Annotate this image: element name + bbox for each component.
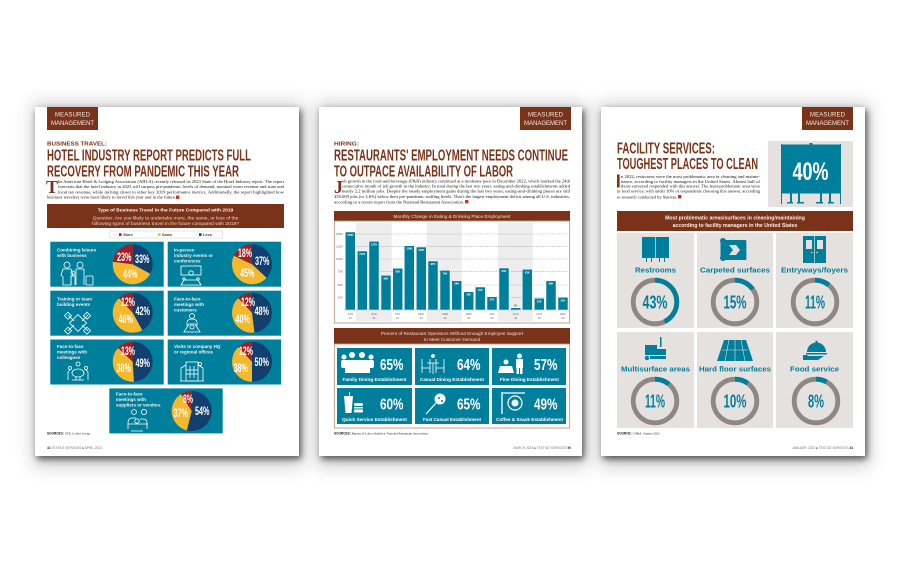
icon: team hands	[64, 312, 91, 334]
pie chart	[118, 297, 150, 326]
title	[334, 148, 568, 181]
bar chart: 25K	[561, 298, 566, 302]
problem areas header banner: according to facility managers in the United States	[673, 223, 798, 229]
bar chart: 22	[443, 316, 447, 320]
bar chart: DEC	[560, 312, 566, 316]
icon: restroom stall	[642, 237, 669, 262]
pie chart: 13%	[121, 346, 135, 358]
icon: carpet roll	[720, 238, 746, 261]
cell: multisurface: Multisurface areas	[621, 366, 690, 374]
panel: in-person events: industry events or	[174, 253, 213, 258]
panel: customers: customers	[174, 308, 197, 312]
bar chart: 21	[396, 316, 400, 320]
intro text: n 2022, restrooms were the most problematic area in cleaning and mainte-	[621, 174, 761, 180]
bar chart: 58K	[454, 282, 459, 286]
bar chart: 79K	[443, 271, 448, 275]
title	[617, 140, 758, 173]
bar chart: 23K	[537, 299, 542, 303]
tile: fine dining	[492, 348, 566, 385]
bar chart: 36K	[466, 293, 471, 297]
pie chart	[236, 297, 269, 326]
cell: carpeted surfaces	[697, 233, 773, 328]
intro text: nance, according to facility managers in the United States. Almost half of	[621, 179, 761, 185]
pie chart: 42%	[136, 306, 150, 318]
cell: carpeted surfaces: Carpeted surfaces	[700, 268, 770, 274]
title	[47, 148, 251, 181]
bar chart: 155K	[347, 233, 354, 237]
panel: combining leisure: Combining leisure	[57, 248, 97, 252]
callout: 40 percent banner	[768, 141, 853, 207]
source: SOURCE: CNBA, Statista 2022	[617, 432, 660, 436]
panel: suppliers: suppliers or vendors	[116, 402, 161, 408]
icon: double doors	[803, 236, 826, 263]
icon: fast food	[344, 392, 363, 413]
bar chart: FEB	[442, 312, 448, 316]
survey header banner	[47, 204, 284, 228]
icon: spatula	[426, 394, 446, 414]
panel: company HQ visits: or regional offices	[174, 350, 214, 354]
bar chart: 22	[490, 316, 494, 320]
cell: restrooms: Restrooms	[635, 268, 676, 274]
cell: restrooms	[617, 233, 694, 328]
cell: food service: Food service	[790, 366, 839, 374]
tile: coffee and snack: Coffee & Snack Establishment	[496, 417, 564, 422]
panel: combining leisure: with business	[56, 253, 87, 258]
panel: in-person events: conferences	[174, 258, 201, 264]
bar chart: 22	[561, 316, 565, 320]
pie chart: 40%	[236, 314, 250, 326]
icon: waiter	[498, 354, 523, 374]
intro text: J	[334, 177, 343, 197]
sources: SOURCES: Bureau of Labor Statistics, National Restaurant Association	[334, 432, 428, 436]
pie chart: 23%	[117, 252, 132, 264]
bar chart: 117K	[359, 252, 365, 256]
donut: 43 percent: 43%	[642, 292, 668, 312]
legend: Same	[162, 232, 173, 237]
bar chart: 58K	[549, 282, 554, 286]
bar chart: 22	[514, 316, 518, 320]
donut: 8 percent: 8%	[808, 392, 824, 412]
bar chart: AUG	[371, 312, 377, 316]
bar chart: 128K	[406, 247, 413, 251]
pie chart: 12%	[241, 297, 255, 309]
pie chart: 12%	[239, 346, 253, 358]
donut: 10 percent: 10%	[724, 392, 746, 412]
panel: company HQ visits: Visits to company HQ	[174, 344, 221, 349]
pie chart: 50%	[254, 357, 269, 369]
icon: office building	[180, 362, 204, 381]
survey header banner: following types of business travel in the future compared with 2019?	[92, 221, 239, 227]
cell: hard floor: Hard floor surfaces	[699, 366, 771, 374]
tile: quick service: 60%	[380, 396, 404, 414]
pie chart: 37%	[255, 256, 270, 268]
cell: multisurface	[617, 332, 694, 428]
pie chart	[174, 394, 210, 421]
tile: family dining: 65%	[380, 357, 404, 374]
section tag	[47, 107, 98, 130]
section tag: MANAGEMENT	[806, 121, 849, 127]
panel: colleagues	[50, 340, 164, 384]
survey header banner: Question: Are you likely to undertake more, the same, or less of the	[93, 216, 239, 222]
legend	[110, 231, 222, 238]
tile: fast casual: 65%	[457, 396, 480, 414]
tile: fine dining: Fine Dining Establishment	[500, 377, 560, 382]
icon: meeting table	[68, 362, 88, 380]
operators header banner	[334, 328, 570, 344]
tile: casual dining: Casual Dining Establishment	[420, 377, 485, 382]
page 3: facility services	[599, 104, 869, 466]
bar chart: 22	[538, 316, 541, 320]
cell: entryways: Entryways/foyers	[781, 268, 848, 274]
icon: serving cloche	[803, 341, 827, 360]
intro text: according to a recent report from the National Restaurant Association.	[334, 199, 464, 204]
cell: food service	[776, 332, 853, 428]
tile: fast casual	[415, 388, 489, 424]
bar chart: 137K	[371, 242, 377, 246]
donut: 15 percent: 15%	[724, 292, 746, 312]
pie chart	[116, 346, 150, 375]
icon: hardwood floor	[717, 340, 753, 361]
icon: cafe table	[422, 354, 444, 374]
pie chart: 38%	[116, 363, 131, 375]
chart title bar	[334, 211, 570, 221]
legend: More	[124, 232, 134, 237]
legend: Less	[203, 232, 212, 237]
icon: family table	[341, 352, 374, 373]
intro text: those surveyed responded with this answer. The least-problematic area were	[621, 184, 760, 189]
sources: SOURCES: STR, CoStar Group	[47, 432, 90, 436]
section tag: MANAGEMENT	[51, 121, 94, 127]
pie chart: 37%	[174, 408, 188, 420]
bar chart: DEC	[418, 312, 424, 316]
panel: training: Training or team	[57, 296, 92, 302]
panel: customers: meetings with	[174, 302, 204, 307]
kicker: HIRING:	[334, 142, 359, 148]
tile: family dining	[337, 348, 412, 385]
pie chart: 38%	[234, 363, 248, 375]
panel: training: building events	[57, 302, 91, 307]
bar chart: 75K	[338, 270, 343, 274]
panel: colleagues: meetings with	[57, 350, 87, 354]
cell: hard floor	[697, 332, 773, 428]
bar chart: JUN	[348, 312, 353, 316]
title: HOTEL INDUSTRY REPORT PREDICTS FULL	[47, 148, 251, 165]
intro text: ob growth in the food-and-beverage (F&B) industry continued at a moderate pace in December 2022, which marked the 24th	[342, 178, 571, 184]
bar chart: 125K	[336, 245, 343, 249]
bar chart: 125K	[418, 248, 425, 252]
problem areas header banner: Most problematic areas/surfaces in cleaning/maintaining	[665, 216, 805, 222]
intro text: consecutive month of job growth in the industry. In total during the last two years, eating-and-drinking establishments added	[342, 184, 571, 190]
bar chart: JUN	[489, 312, 495, 316]
icon: family	[61, 262, 93, 285]
intro text: local tax revenue, while inching closer to other key 2019 performance metrics. Additionally, the report highlighted how	[58, 189, 285, 195]
survey header banner: Type of Business Travel in the Future Compared with 2019	[98, 208, 234, 214]
footer: MARCH 2023 ■ TEXTILE SERVICES 59	[513, 446, 571, 450]
pie chart: 12%	[121, 297, 135, 309]
kicker: BUSINESS TRAVEL:	[47, 142, 107, 148]
bar chart: 25K	[338, 295, 343, 299]
title: FACILITY SERVICES:	[617, 140, 715, 158]
section tag: MANAGEMENT	[524, 121, 567, 127]
pie chart: 46%	[118, 314, 133, 326]
section tag: MEASURED	[528, 112, 564, 118]
bar chart: 50K	[338, 283, 343, 287]
tile: fine dining: 57%	[534, 357, 558, 374]
icon: conference	[181, 266, 201, 285]
donut: 11 percent: 11%	[805, 292, 825, 312]
problem areas header banner	[617, 211, 853, 231]
bar chart: 5K	[514, 304, 517, 308]
intro text: forecasts that the hotel industry in 2023 will surpass pre-pandemic levels of demand, nominal room revenue and state and	[58, 184, 285, 190]
tile: fast casual: Fast Casual Establishment	[423, 417, 482, 422]
icon: customer meeting	[184, 314, 200, 332]
section tag: MEASURED	[55, 112, 91, 118]
tile: family dining: Family Dining Establishment	[342, 377, 407, 382]
bar chart: 84K	[502, 269, 507, 273]
bar chart: 21	[420, 316, 423, 320]
panel: suppliers: meetings with	[116, 397, 146, 402]
intro text	[334, 177, 571, 204]
intro text: in food service, with under 10% of respondents choosing this answer, according	[617, 189, 761, 195]
page 1: business travel	[33, 104, 303, 466]
tile: casual dining: 64%	[457, 357, 480, 374]
section tag	[802, 107, 853, 130]
callout: 40 percent banner: 40%	[792, 158, 828, 186]
bar chart: 22	[467, 316, 471, 320]
section tag	[520, 107, 571, 130]
pie chart	[117, 252, 150, 281]
operators frame	[334, 344, 570, 428]
panel: combining leisure	[50, 242, 164, 287]
bar chart: 83K	[395, 269, 400, 273]
bar chart: APR	[466, 312, 472, 316]
icon: cafe sign	[502, 392, 525, 414]
intro text	[46, 177, 285, 200]
bar chart: OCT	[536, 312, 543, 316]
panel: customers	[168, 291, 281, 336]
pie chart: 45%	[240, 268, 254, 280]
bar chart: 97K	[431, 262, 436, 266]
panel: in-person events	[168, 242, 281, 287]
operators header banner: Percent of Restaurant Operators Without Enough Employee Support	[381, 331, 524, 336]
page 2: hiring	[317, 104, 586, 466]
pie chart: 44%	[123, 269, 138, 281]
pie chart: 33%	[135, 254, 150, 266]
tile: quick service	[337, 388, 412, 424]
bar chart: 46K	[478, 288, 483, 292]
title: TO OUTPACE AVAILABILITY OF LABOR	[334, 164, 513, 181]
pie chart: 48%	[254, 306, 269, 318]
section tag: MEASURED	[810, 112, 846, 118]
bar chart: 27K	[490, 298, 495, 302]
intro text: he American Hotel & Lodging Association (AHLA) recently released its 2023 State of the Hotel Industry report. The report	[58, 179, 285, 184]
tile: casual dining	[415, 348, 489, 385]
bar chart: 21	[349, 316, 352, 320]
pie chart: 54%	[195, 406, 210, 418]
bar chart: 150K	[336, 232, 343, 236]
panel: colleagues: colleagues	[57, 355, 81, 360]
panel: in-person events: In-person	[174, 248, 195, 252]
panel: training	[50, 291, 164, 336]
bar chart: 69K	[384, 276, 389, 280]
pie chart: 18%	[238, 248, 252, 260]
panel: colleagues: Face-to-face	[57, 344, 84, 349]
pie chart	[234, 346, 269, 375]
pie chart	[238, 248, 270, 280]
intro text: to research conducted by Statista.	[617, 194, 677, 200]
tile: coffee and snack: 49%	[534, 396, 558, 414]
donut: 11 percent: 11%	[645, 392, 665, 412]
chart title bar: Monthly Change in Eating & Drinking Place Employment	[394, 214, 511, 219]
panel: customers: Face-to-face	[174, 296, 201, 302]
intro text	[617, 174, 761, 200]
icon: floor scrubber	[645, 337, 666, 360]
footer: JANUARY 2023 ■ TEXTILE SERVICES 43	[792, 446, 853, 450]
panel: suppliers	[109, 388, 223, 433]
panel: suppliers: Face-to-face	[116, 392, 143, 396]
icon: vendor meeting	[128, 409, 148, 431]
panel: company HQ visits	[168, 340, 281, 384]
bar chart: 100K	[336, 257, 343, 261]
bar chart: 81K	[525, 270, 530, 274]
intro text: nearly 2.2 million jobs. Despite the steady employment gains during the last two years, eating-and-drinking places are still	[342, 188, 571, 194]
tile: coffee and snack	[492, 388, 566, 424]
footer: 44 TEXTILE SERVICES ■ APRIL 2023	[47, 446, 102, 450]
pie chart: 49%	[136, 358, 150, 370]
cell: entryways	[776, 233, 853, 328]
title: RESTAURANTS' EMPLOYMENT NEEDS CONTINUE	[334, 148, 568, 165]
intro text: business travelers were most likely to travel this year and in the future.	[47, 195, 176, 200]
intro text: 450,000 jobs (or 3.6%) below their pre-pandemic staffing levels. That's the largest employment deficit among all U.S. industries,	[334, 194, 570, 200]
title: TOUGHEST PLACES TO CLEAN	[617, 156, 758, 173]
bar chart	[334, 221, 570, 323]
operators header banner: to Meet Customer Demand	[424, 337, 481, 342]
pie chart: 8%	[183, 394, 193, 406]
bar chart: OCT	[395, 312, 401, 316]
tile: quick service: Quick Service Establishment	[342, 417, 408, 422]
intro text: T	[46, 177, 58, 197]
bar chart: AUG	[513, 312, 519, 316]
title: RECOVERY FROM PANDEMIC THIS YEAR	[47, 164, 239, 181]
bar chart: 21	[372, 316, 376, 320]
